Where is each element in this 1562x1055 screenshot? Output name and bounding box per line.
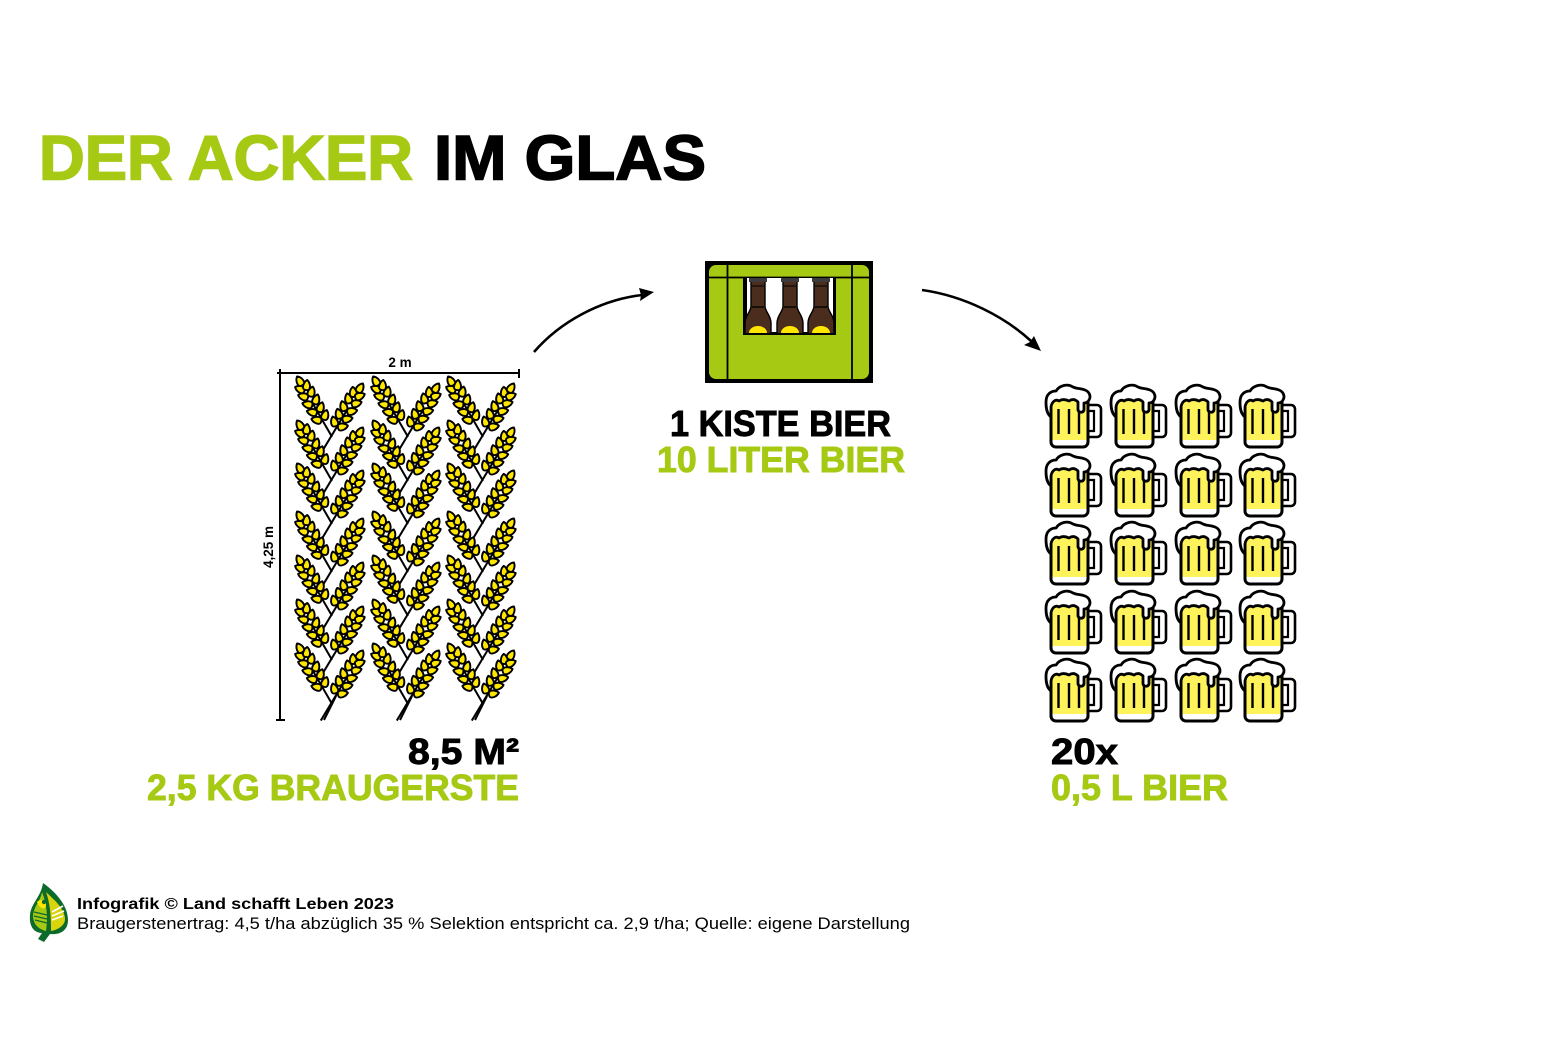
panel: field xyxy=(147,355,524,808)
arrow: field to crate xyxy=(534,288,654,352)
mug count label: 20x xyxy=(1051,731,1118,772)
title xyxy=(39,124,706,194)
dimension: height xyxy=(261,369,285,720)
title: IM GLAS xyxy=(434,124,706,194)
arrow: crate to mugs xyxy=(922,290,1041,351)
field area label: 8,5 M² xyxy=(408,731,519,772)
icon: wheat field xyxy=(287,371,524,726)
icon: grid of 20 beer mugs xyxy=(1046,385,1295,721)
footer xyxy=(30,883,910,942)
panel: crate xyxy=(657,261,905,480)
crate count label: 1 KISTE BIER xyxy=(670,403,891,444)
credit line: Infografik © Land schafft Leben 2023 xyxy=(77,896,394,913)
icon: beer crate xyxy=(705,261,873,383)
crate volume label: 10 LITER BIER xyxy=(657,439,905,480)
icon: leaf logo xyxy=(30,883,68,942)
dimension: height: 4,25 m xyxy=(261,526,276,568)
dimension: width: 2 m xyxy=(388,355,412,370)
panel: beer mugs xyxy=(1046,385,1295,808)
dimension: width xyxy=(277,355,519,378)
barley weight label: 2,5 KG BRAUGERSTE xyxy=(147,767,519,808)
mug volume label: 0,5 L BIER xyxy=(1051,767,1228,808)
source note: Braugerstenertrag: 4,5 t/ha abzüglich 35 % Selektion entspricht ca. 2,9 t/ha; Quelle: eigene Darstellung xyxy=(77,914,910,933)
title: DER ACKER xyxy=(39,124,413,194)
